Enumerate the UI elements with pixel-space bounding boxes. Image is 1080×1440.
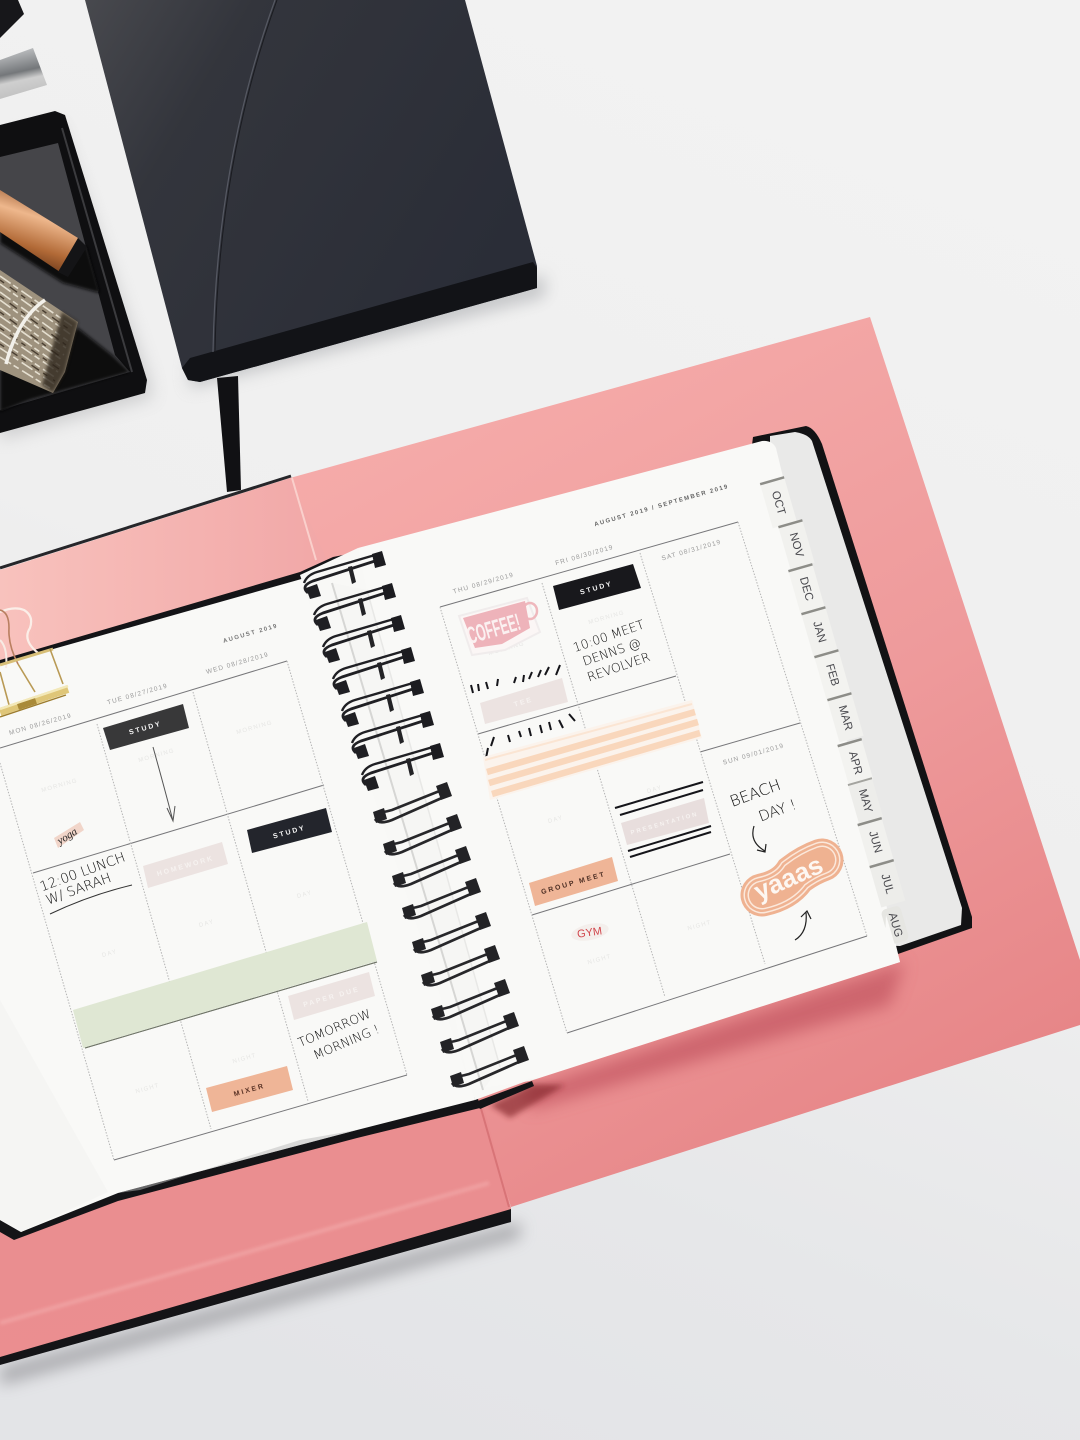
tab: FEB [814, 650, 851, 699]
day label: Sunday: SUN 09/01/2019 [722, 742, 785, 767]
tab: APR [838, 739, 873, 786]
tab: JUN: JUN [866, 830, 884, 854]
tab: NOV [778, 520, 815, 569]
sticker: paper due: PAPER DUE [303, 986, 361, 1009]
tab: MAY [848, 778, 883, 824]
faint section labels left: MORNING [138, 748, 176, 764]
tab: JUL: JUL [878, 873, 896, 896]
faint section labels right: MORNING [488, 641, 526, 657]
sticker: mixer: MIXER [233, 1083, 266, 1098]
tab: FEB: FEB [823, 663, 841, 688]
clip clasp shading [18, 701, 36, 707]
faint section labels right: DAY [646, 785, 663, 795]
faint section labels right [488, 610, 712, 966]
tab: NOV: NOV [787, 531, 805, 559]
binder foot under rings [475, 1081, 534, 1109]
tab: OCT [760, 477, 797, 528]
sticker: group meet [529, 857, 618, 906]
dark notebook [85, 0, 545, 388]
binder clips [0, 608, 68, 717]
tube cap [58, 238, 87, 277]
faint section labels left: MORNING [236, 720, 274, 736]
tab: DEC: DEC [797, 576, 815, 602]
shadow under tube [0, 225, 100, 293]
sticker: homework [143, 842, 228, 888]
pink folder: lower left cover [0, 1085, 511, 1359]
handwriting: beach day: DAY ! [757, 797, 799, 825]
page gutter crease [332, 583, 500, 1090]
hand-drawn arrow down [153, 747, 175, 821]
handwriting: tomorrow morning: MORNING ! [311, 1021, 382, 1063]
tray with copper tube and sage bundle [0, 111, 152, 440]
doodle ticks lower [486, 714, 575, 758]
day label: Tuesday: TUE 08/27/2019 [106, 683, 169, 707]
sticker: mixer [206, 1066, 293, 1112]
black binder cover right [745, 426, 972, 954]
doodle ticks upper [471, 665, 560, 693]
highlight band on lower cover [0, 1183, 489, 1323]
object: black cap top left [0, 0, 24, 38]
tab: MAR [827, 693, 864, 742]
sticker: homework: HOMEWORK [156, 855, 215, 878]
clip gold bar [0, 689, 68, 712]
day label: Friday: FRI 08/30/2019 [555, 544, 614, 567]
faint section labels left: DAY [198, 919, 215, 929]
handwriting: beach day [727, 776, 799, 825]
clip handle white loop [0, 608, 38, 653]
pink folder: back right cover [290, 317, 1080, 1207]
faint section labels left: DAY [296, 890, 313, 900]
shadow under folder [0, 1222, 520, 1385]
tab: APR: APR [846, 750, 864, 776]
sticker: presentation: PRESENTATION [630, 811, 699, 837]
handwriting: meeting note: DENNS @ [580, 635, 643, 669]
sticker: coffee cup: COFFEE! [464, 609, 524, 650]
faint section labels right: NIGHT [687, 920, 712, 932]
faint section labels right: NIGHT [587, 954, 612, 966]
right page [358, 441, 900, 1090]
left header: August 2019: AUGUST 2019 [223, 623, 279, 645]
sticker: gym: GYM [576, 925, 603, 941]
tab: MAY: MAY [856, 788, 874, 815]
page gutter [300, 548, 535, 1100]
handwriting: meeting note: REVOLVER [585, 649, 652, 684]
sticker: presentation [621, 798, 709, 845]
object: silver tube top left [0, 48, 47, 99]
clip handle rose loop [0, 610, 18, 664]
handwriting: lunch note: W/ SARAH [44, 870, 114, 908]
sticker: study Wednesday: STUDY [272, 825, 307, 841]
clip frame [0, 649, 53, 665]
sticker: tee: TEE [513, 696, 534, 709]
sticker: gym [570, 920, 610, 944]
sticker: paper due [288, 972, 375, 1020]
sticker: study Friday [553, 564, 641, 610]
black binder edge left [0, 552, 480, 1240]
handwriting: lunch note [38, 849, 132, 914]
day label: Saturday: SAT 08/31/2019 [661, 539, 722, 562]
faint section labels left: MORNING [41, 778, 79, 794]
shadow beneath planner [525, 962, 905, 1110]
handwriting: lunch note: 12:00 LUNCH [38, 849, 127, 895]
day label: Thursday: THU 08/29/2019 [452, 571, 515, 596]
tab: MAR: MAR [836, 704, 854, 732]
handwriting: beach day: BEACH [727, 776, 783, 811]
sticker: yoga: yoga [54, 825, 80, 848]
spiral binding rings [304, 551, 529, 1087]
tab: AUG [880, 905, 910, 945]
pink folder: left cover top [0, 478, 345, 700]
handwriting: meeting note: 10:00 MEET [571, 616, 646, 655]
sticker: study Tuesday: STUDY [128, 721, 163, 737]
faint section labels right: MORNING [588, 610, 626, 626]
sticker: group meet: GROUP MEET [540, 871, 607, 896]
bookmark ribbon [217, 376, 241, 492]
sage bundle [0, 270, 78, 393]
folder bottom dark edge [0, 1209, 511, 1365]
sticker: study Friday: STUDY [579, 581, 614, 597]
doodle lines below presentation [628, 826, 711, 857]
sticker: study Wednesday [247, 808, 332, 853]
tab: OCT: OCT [769, 490, 787, 516]
white back insert [770, 432, 962, 946]
tab: JUL [870, 860, 905, 907]
tab: AUG: AUG [886, 911, 904, 939]
tab: JAN: JAN [810, 620, 828, 644]
day label: Monday: MON 08/26/2019 [8, 712, 73, 737]
day label: Wednesday: WED 08/28/2019 [205, 651, 270, 676]
right grid [440, 522, 867, 1033]
hand-drawn arrow to sticker [753, 826, 766, 852]
faint section labels right: DAY [547, 815, 564, 825]
tab: DEC [788, 564, 825, 613]
dark shadow at gutter base [490, 1084, 565, 1118]
faint section labels left [41, 720, 313, 1095]
washi tape peach stripes [483, 700, 702, 800]
month tabs [760, 477, 910, 945]
hand-drawn arrow up [795, 911, 811, 940]
faint section labels left: NIGHT [232, 1053, 257, 1065]
tab: JAN [801, 607, 838, 656]
sticker: study Tuesday [103, 704, 189, 750]
washi tape green [73, 922, 377, 1048]
handwriting: tomorrow morning: TOMORROW [296, 1006, 373, 1050]
doodle lines above presentation [615, 782, 703, 815]
copper tube [0, 190, 78, 272]
tab: JUN [858, 818, 893, 865]
right page bottom edge over tabs [884, 915, 900, 967]
faint section labels left: DAY [101, 949, 118, 959]
shadow by sage bundle [0, 328, 130, 412]
handwriting: meeting note [571, 616, 652, 684]
left page [0, 565, 475, 1232]
faint section labels left: NIGHT [135, 1083, 160, 1095]
sticker: yaaas: yaaas [749, 849, 827, 906]
sticker: tee [480, 678, 568, 724]
sticker: yoga [54, 822, 84, 848]
left grid [0, 661, 407, 1160]
right header: August / September 2019: AUGUST 2019 / SEPTEMBER 2019 [594, 484, 730, 528]
folder top dark edge [0, 476, 291, 568]
sticker: coffee cup [459, 598, 540, 655]
folder spine crease [480, 1105, 509, 1207]
